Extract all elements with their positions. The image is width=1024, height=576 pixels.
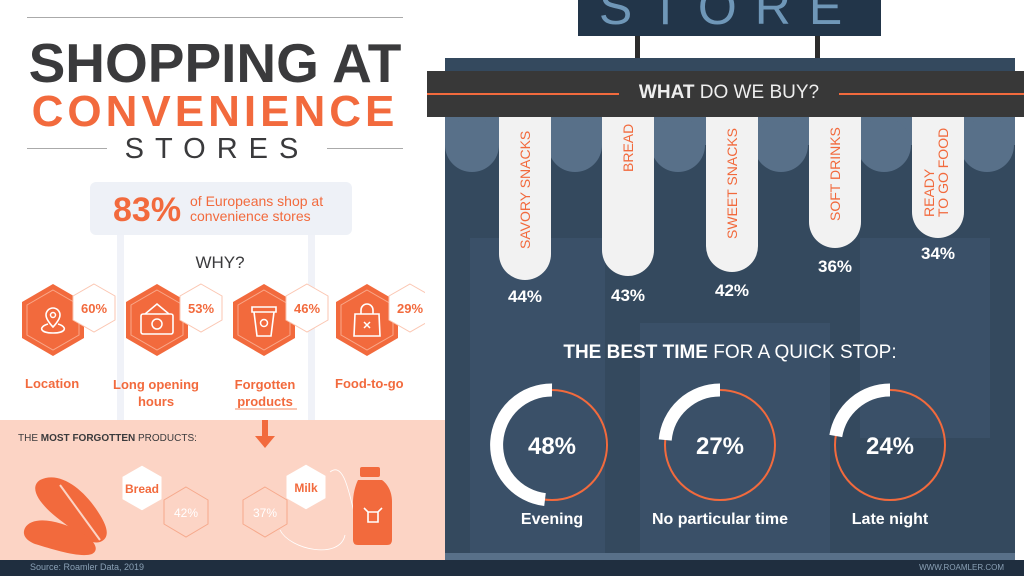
- product percentages: 36%: [818, 257, 852, 276]
- awning scallops: [445, 117, 1015, 172]
- store building: [445, 58, 1015, 560]
- hex milk: Milk: [294, 481, 318, 495]
- text: SWEET SNACKS: [724, 128, 740, 239]
- text: BREAD: [620, 124, 636, 172]
- stat box 83%: 83%: [113, 191, 181, 229]
- text: TO GO FOOD: [935, 128, 951, 217]
- donut charts: [490, 384, 946, 528]
- reasons row: Food-to-go: [335, 376, 404, 391]
- hex bread: [121, 464, 163, 512]
- heading: best time: THE BEST TIME FOR A QUICK STOP:: [563, 342, 897, 363]
- heading bar: what do we buy: WHAT DO WE BUY?: [639, 82, 819, 103]
- reasons row: Long opening: [113, 377, 199, 392]
- product percentages: 34%: [921, 244, 955, 263]
- donut charts: Late night: [852, 511, 929, 528]
- strips: products: [499, 117, 551, 280]
- donut charts: 48%: [528, 433, 576, 460]
- product percentages: 42%: [715, 281, 749, 300]
- title: SHOPPING AT: [29, 32, 401, 94]
- arrow: [255, 412, 275, 448]
- panel: most forgotten products: 42%: [174, 506, 198, 520]
- reasons row: [22, 284, 425, 410]
- panel: most forgotten products: THE MOST FORGOTTEN PRODUCTS:: [18, 433, 197, 444]
- product percentages: 44%: [508, 287, 542, 306]
- donut charts: 27%: [696, 433, 744, 460]
- panel: most forgotten products: [0, 420, 445, 560]
- donut charts: Evening: [521, 511, 583, 528]
- text: SOFT DRINKS: [827, 127, 843, 221]
- text: READY: [921, 169, 937, 217]
- reasons row: 53%: [188, 301, 214, 316]
- footer: Source: Roamler Data, 2019: [30, 562, 144, 572]
- reasons row: 29%: [397, 301, 423, 316]
- reasons row: hours: [138, 394, 174, 409]
- donut charts: 24%: [866, 433, 914, 460]
- reason labels: Location: [25, 376, 79, 391]
- left background pillars: [117, 234, 124, 420]
- product percentages: [508, 244, 955, 306]
- window panels: [470, 238, 605, 560]
- reasons row: 46%: [294, 301, 320, 316]
- reasons row: Forgotten: [235, 377, 295, 392]
- icon: milk bottle: [353, 467, 392, 545]
- hex milk: [285, 463, 327, 511]
- icon: bread: [24, 477, 107, 555]
- footer: WWW.ROAMLER.COM: [919, 563, 1004, 572]
- strips: products: SAVORY SNACKS: [517, 131, 533, 249]
- heading bar: what do we buy: [427, 71, 1024, 117]
- title: CONVENIENCE: [32, 87, 398, 136]
- footer: [0, 560, 1024, 576]
- reasons row: products: [237, 394, 293, 409]
- hex bread: Bread: [125, 482, 159, 496]
- heading: why: WHY?: [195, 253, 245, 272]
- panel: most forgotten products: 37%: [253, 506, 277, 520]
- donut charts: No particular time: [652, 511, 788, 528]
- product percentages: 43%: [611, 286, 645, 305]
- reasons row: 60%: [81, 301, 107, 316]
- stat box 83%: [90, 182, 352, 235]
- title: [27, 17, 403, 165]
- stat box 83%: of Europeans shop at: [190, 193, 323, 209]
- stat box 83%: convenience stores: [190, 208, 311, 224]
- title: STORES: [125, 133, 309, 165]
